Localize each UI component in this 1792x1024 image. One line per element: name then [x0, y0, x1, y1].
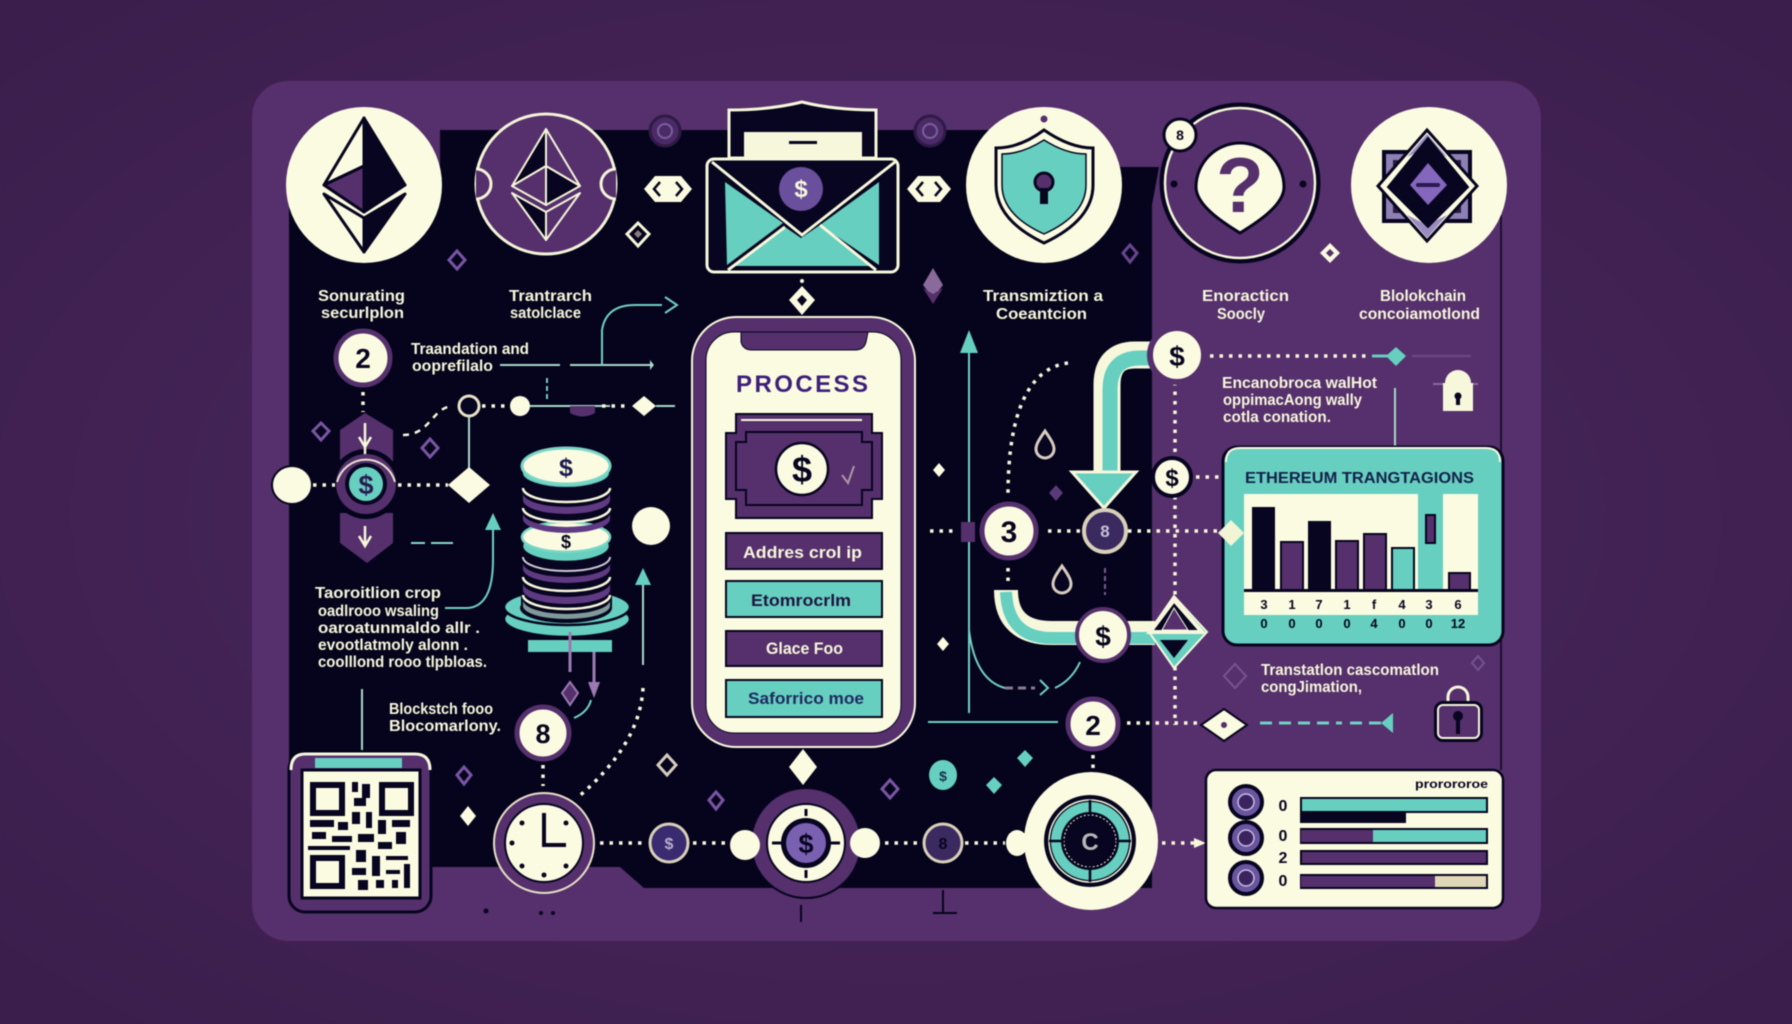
axis labels top row: 1: [1343, 597, 1351, 612]
decor diamond cream right: [1320, 243, 1340, 263]
field: address: Addres crol ip: [743, 543, 862, 562]
badge: number 2 left: 2: [355, 343, 371, 374]
icon: blockchain star circle: [1351, 107, 1507, 263]
axis labels top row: 6: [1454, 597, 1462, 612]
label: transaction: satolclace: [510, 305, 581, 322]
text: transition description: Taoroitlion crop: [315, 585, 441, 602]
dotted: main coin to coin: [885, 841, 922, 845]
icon: diamond under envelope: [789, 279, 815, 315]
icon: code hexagon right: [907, 176, 951, 202]
icon: dollar coin top: $: [1169, 341, 1185, 372]
text: transaction confirmation: congJimation,: [1261, 679, 1362, 696]
text: transition description: evootlatmoly alonn .: [318, 637, 468, 654]
decor diamond purple: [449, 251, 465, 269]
label: transaction: Trantrarch: [509, 288, 592, 305]
field: address: [726, 533, 882, 569]
axis labels top row: f: [1372, 597, 1377, 612]
axis labels top row: [1260, 597, 1462, 612]
node: left coin column: $: [358, 470, 374, 500]
text: encryption wallet note: Encanobroca walHot: [1222, 375, 1377, 392]
field: ethereum: [726, 581, 882, 617]
label: blockchain: concoiamotlond: [1359, 306, 1480, 323]
connector: node row: [403, 396, 675, 472]
dotted connectors to clock: [543, 688, 643, 798]
icon: teal coin and diamonds: [929, 750, 1033, 794]
axis labels bottom row: 0: [1315, 616, 1323, 631]
text: transition description: oaroatunmaldo allr .: [318, 620, 480, 637]
dotted line with diamond: [1210, 347, 1471, 366]
label: generating: securlplon: [321, 305, 404, 322]
icon: cream dot right of stack: [632, 507, 670, 545]
dotted: coin to target: [965, 841, 1005, 845]
list digits: 2: [1279, 850, 1288, 867]
dotted: coin to main coin: [693, 841, 728, 845]
badge: number 2 right: [1068, 699, 1118, 749]
axis labels top row: 1: [1288, 597, 1296, 612]
field: reference: [726, 680, 882, 717]
list digits: 0: [1279, 798, 1288, 815]
icon: coin stack: $: [559, 454, 573, 482]
decor diamond purple right: [1123, 245, 1137, 262]
icon: main dollar coin: $: [798, 829, 814, 859]
arrow: dashed right with branch: [500, 297, 677, 400]
badge: number 2 left: [336, 331, 390, 385]
icon: code hexagon left: [644, 176, 692, 202]
line into badge 2: [928, 721, 1058, 723]
label: encryption: Enoracticn: [1202, 288, 1289, 305]
axis labels top row: 3: [1425, 597, 1433, 612]
label: generating: Sonurating: [318, 288, 405, 305]
text: encryption wallet note: [1222, 375, 1377, 426]
dotted: clock to coin: [600, 841, 645, 845]
badge: number 2 right: 2: [1085, 710, 1101, 741]
field: reference: Saforrico moe: [748, 689, 864, 708]
pipe: lower teal: [1006, 590, 1155, 638]
axis labels bottom row: [1260, 616, 1465, 631]
icon: target circle: C: [1081, 829, 1099, 856]
pipe arrow: teal down: [1072, 355, 1150, 508]
icon: small ethereum: [923, 268, 943, 304]
icon: dollar coin mid: [1153, 458, 1191, 496]
main panel: [252, 81, 1541, 941]
progress bars: [1300, 798, 1487, 888]
label: transmission: [983, 288, 1103, 323]
text: transition description: oadlrooo wsaling: [318, 603, 439, 620]
icon: small coin top right: [915, 116, 945, 146]
badge: number 3: [930, 504, 1082, 558]
icon: small coin bottom: $: [665, 836, 674, 853]
connector: dotted with diamond and arrow: [1127, 709, 1393, 741]
label: transmission: Transmiztion a: [983, 288, 1103, 305]
heading: process: PROCESS: [736, 371, 868, 398]
phone notch: [741, 332, 868, 350]
text: encryption wallet note: cotla conation.: [1223, 409, 1331, 426]
text: transition description: coolllond rooo tlpbloas.: [318, 654, 487, 671]
list digits: [1279, 798, 1288, 890]
icon: small coin center: [1084, 510, 1126, 552]
label: generating: [318, 288, 405, 322]
icon: dollar coin top: [1150, 328, 1204, 382]
dotted: small coin to chart: [1128, 529, 1220, 533]
arrow: long teal vertical: [960, 330, 978, 713]
banknote icon: [726, 414, 882, 518]
axis labels bottom row: 4: [1370, 616, 1378, 631]
connectors below coin stack: [562, 632, 600, 718]
text: encryption wallet note: oppimacAong wally: [1223, 392, 1362, 409]
text: blockchain fee note: Blockstch fooo: [389, 701, 493, 718]
icon: small coin right: [924, 824, 962, 862]
icon: target circle: [1006, 772, 1158, 910]
axis labels bottom row: 12: [1451, 616, 1465, 631]
text: transaction confirmation: [1261, 662, 1439, 696]
decor faint diamonds: [1224, 656, 1484, 688]
drops: [1036, 431, 1071, 593]
icon: dollar coin lower: $: [1095, 621, 1111, 652]
icon: coin stack: $: [561, 532, 571, 552]
axis labels bottom row: 0: [1288, 616, 1296, 631]
list icons: [1230, 786, 1262, 894]
icon: main dollar coin: [730, 749, 880, 898]
axis labels bottom row: 0: [1398, 616, 1406, 631]
icon: small lock: [1433, 370, 1478, 411]
icon: shield circle: [966, 107, 1122, 263]
icon: envelope: [707, 102, 898, 272]
icon: small coin center: 8: [1100, 522, 1110, 541]
text: blockchain fee note: Blocomarlony.: [389, 718, 501, 735]
axis labels bottom row: 0: [1260, 616, 1268, 631]
icon: dollar coin mid: $: [1165, 465, 1179, 492]
icon: question ring: 8: [1176, 127, 1184, 143]
decor diamonds left: [313, 423, 438, 457]
bar chart: [1244, 494, 1478, 615]
icon: lock: [1436, 687, 1481, 740]
label: blockchain: [1359, 288, 1480, 323]
icon: question ring: ?: [1216, 141, 1264, 229]
icon: question ring: [1162, 105, 1318, 261]
label: blockchain: Blolokchain: [1380, 288, 1466, 305]
dotted below 2: [1091, 755, 1095, 770]
badge: number 8: [517, 707, 569, 759]
arrow: dotted to bottom card: [1162, 838, 1206, 848]
line above qr: [361, 689, 363, 750]
axis labels top row: 4: [1398, 597, 1406, 612]
stack upper bands: [523, 513, 610, 533]
badge: number 3: 3: [1001, 516, 1017, 549]
decor diamonds bottom: [457, 755, 898, 826]
axis labels bottom row: 0: [1343, 616, 1351, 631]
node: left coin column: [272, 413, 490, 563]
label: transaction: [509, 288, 592, 322]
dark background area: [289, 130, 1159, 888]
right edge line: [1500, 215, 1502, 770]
axis labels bottom row: 0: [1425, 616, 1433, 631]
badge: number 8: 8: [535, 719, 551, 749]
decor diamonds center right: [933, 463, 1063, 651]
bottom marks: [484, 890, 957, 922]
label: encryption: Soocly: [1217, 306, 1265, 323]
text: transition description: [315, 585, 487, 671]
dotted curve to badge 3: [1008, 363, 1068, 495]
icon: qr code card: [289, 753, 431, 912]
field: gas fee: [726, 631, 882, 666]
axis labels top row: 7: [1315, 597, 1323, 612]
field: gas fee: Glace Foo: [766, 639, 843, 658]
label: encryption: [1202, 288, 1289, 323]
dotted vertical: [1173, 382, 1177, 725]
text: translation note: ooprefilalo: [412, 358, 493, 375]
text: transaction confirmation: Transtatlon cascomatlon: [1261, 662, 1439, 679]
field: ethereum: Etomrocrlm: [751, 591, 851, 610]
text: translation note: Traandation and: [411, 341, 529, 358]
arrow: teal curved right: [969, 630, 1080, 695]
icon: clock: [494, 793, 594, 893]
text: blockchain fee note: [389, 701, 501, 735]
icon: envelope: $: [794, 176, 808, 203]
panel: ethereum transactions chart: [1223, 447, 1503, 645]
stack lower bands: [523, 600, 610, 619]
panel: bottom progress list: [1206, 770, 1503, 908]
icon: small coin bottom: [650, 824, 688, 862]
icon: ethereum cream circle: [286, 107, 442, 263]
decor diamond cream: [627, 223, 649, 246]
arrow: teal up to stack: [635, 568, 651, 665]
icon: small coin right: 8: [939, 836, 948, 853]
diamond: chart connector: [1218, 520, 1244, 546]
chart title: ETHEREUM TRANGTAGIONS: [1245, 470, 1474, 487]
icon: small coin top left: [650, 116, 680, 146]
arrow: teal curve from text: [445, 513, 501, 608]
axis labels top row: 3: [1260, 597, 1268, 612]
dotted line down from 2: [361, 392, 365, 412]
icon: coin stack: [504, 448, 630, 652]
phone: process screen: [692, 317, 915, 747]
banknote icon: $: [792, 449, 812, 490]
line to chart card: [1394, 388, 1396, 447]
list digits: 0: [1279, 828, 1288, 845]
icon: ethereum purple circle: [476, 114, 616, 254]
list digits: 0: [1279, 873, 1288, 890]
icon: teal coin and diamonds: $: [939, 768, 947, 784]
diamond: split triangle: [1149, 596, 1207, 668]
dotted and dashed purple: [1008, 568, 1105, 595]
label: transmission: Coeantcion: [996, 306, 1087, 323]
icon: dollar coin lower: [1077, 609, 1129, 661]
text: translation note: [411, 341, 529, 375]
list title: prorororoe: [1415, 777, 1488, 791]
